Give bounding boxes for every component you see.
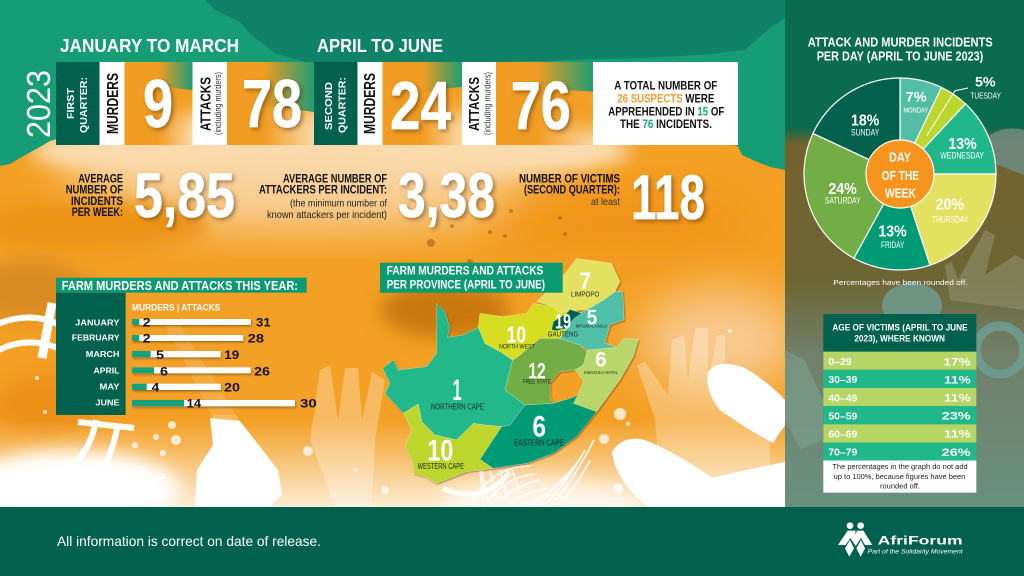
row: February: 2 [143, 332, 151, 346]
row: February: FEBRUARY [72, 333, 120, 343]
second quarter strip: ATTACKS [466, 77, 483, 131]
province: Limpopo: LIMPOPO [571, 292, 600, 299]
pie labels: THURSDAY [932, 214, 968, 224]
row: 70-79: 26% [942, 447, 971, 459]
row: 50-59: 50–59 [828, 411, 858, 422]
pie labels: 5% [975, 74, 996, 90]
second quarter strip: 24 [390, 68, 451, 144]
label: year 2023: 2023 [20, 70, 57, 138]
province: North West: NORTH WEST [499, 343, 535, 350]
logo: AfriForum: AfriForum [878, 533, 963, 547]
province: Limpopo [571, 268, 600, 299]
row: 70-79: 70–79 [828, 448, 858, 459]
row: March [86, 348, 240, 362]
stat: attackers per incident: known attackers per incident) [267, 209, 387, 221]
heading: attack and murder incidents per day: PER DAY (APRIL TO JUNE 2023) [817, 49, 983, 64]
table: age of victims: 2023), WHERE KNOWN [854, 334, 945, 344]
row: 30-39: 30–39 [828, 375, 858, 386]
stat: attackers per incident: ATTACKERS PER INCIDENT: [259, 184, 387, 196]
heading: farm murders per province: FARM MURDERS AND ATTACKS [387, 263, 543, 277]
province: Western Cape: 10 [427, 435, 453, 468]
callout: suspects apprehended: 26 SUSPECTS WERE [617, 93, 715, 105]
row: April: APRIL [94, 365, 120, 375]
centre circle [866, 140, 934, 208]
pie labels: 24% [828, 181, 857, 198]
background: paint splatter [35, 209, 732, 494]
stat: attackers per incident: 3,38 [398, 161, 495, 231]
pie labels: 13% [878, 224, 907, 241]
panel: farm murders and attacks this year [56, 278, 317, 415]
table note: rounded off. [880, 484, 920, 491]
second quarter strip [314, 62, 593, 145]
stat: number of victims: 118 [631, 163, 705, 233]
logo: AfriForum: Part of the Solidarity Movement [868, 549, 963, 556]
row: 0-29 [823, 352, 976, 370]
province: Western Cape [418, 435, 464, 471]
row: 40-49: 11% [944, 393, 971, 405]
stat: number of victims: at least [591, 196, 620, 208]
heading: farm murders per province [380, 263, 563, 293]
stat: incidents per week [66, 161, 235, 231]
province: Gauteng: 19 [555, 310, 571, 334]
background: translucent raised hands [165, 325, 770, 507]
pie labels: 20% [936, 196, 964, 213]
province: Free State: 12 [528, 358, 546, 383]
stat: attackers per incident [259, 161, 495, 231]
row: May [100, 380, 240, 394]
province: Mpumalanga [576, 306, 608, 330]
footer band [0, 507, 1024, 576]
pie labels: TUESDAY [970, 90, 1001, 100]
province: KwaZulu-Natal: 6 [595, 348, 607, 372]
row: February: 28 [248, 332, 264, 346]
province: KwaZulu-Natal [584, 348, 619, 376]
right panel [785, 0, 1024, 507]
pie labels: 13% [948, 136, 977, 153]
second quarter strip: SECOND [323, 82, 335, 130]
row: January: 31 [256, 316, 271, 330]
row: 60-69: 11% [944, 429, 971, 441]
province: Mpumalanga: 5 [587, 306, 597, 330]
row: January: 2 [143, 316, 151, 330]
province: Western Cape: WESTERN CAPE [418, 462, 464, 471]
map shapes [383, 258, 638, 483]
province: Gauteng: GAUTENG [548, 330, 578, 339]
first quarter strip: 78 [242, 66, 302, 142]
tuesday leader line [927, 88, 968, 136]
heading: attack and murder incidents per day [808, 35, 993, 64]
pie labels: WEEK [885, 187, 917, 201]
first quarter strip: ATTACKS [198, 77, 215, 131]
first quarter strip: (including murders) [213, 72, 223, 135]
table: age of victims [823, 314, 976, 493]
province: Northern Cape: NORTHERN CAPE [431, 402, 484, 411]
province: Eastern Cape: EASTERN CAPE [514, 438, 564, 448]
row: 0-29: 17% [943, 356, 971, 368]
province: Eastern Cape [514, 411, 564, 448]
province: Northern Cape [431, 374, 484, 411]
pie labels: SATURDAY [825, 196, 861, 206]
background: darker green paint band [205, 0, 785, 62]
second quarter strip: 76 [511, 68, 571, 144]
pie labels: SUNDAY [851, 128, 879, 138]
panel: farm murders and attacks this year: MURDERS | ATTACKS [132, 302, 220, 312]
stat: incidents per week: 5,85 [134, 161, 235, 231]
row: January: JANUARY [75, 318, 120, 328]
callout: suspects apprehended: APPREHENDED IN 15 OF [608, 106, 724, 118]
callout: suspects apprehended [593, 62, 738, 145]
row: 60-69 [823, 424, 976, 442]
row: March: MARCH [86, 349, 120, 359]
background: fingerprint [443, 440, 594, 507]
pie labels: 7% [906, 89, 927, 105]
pie labels: DAY [889, 151, 911, 165]
callout: suspects apprehended: THE 76 INCIDENTS. [620, 119, 712, 131]
table: age of victims: AGE OF VICTIMS (APRIL TO JUNE [832, 323, 968, 333]
row: June: JUNE [96, 398, 120, 408]
row: May: MAY [100, 381, 120, 391]
map: provinces of South Africa [383, 258, 638, 483]
second quarter strip: QUARTER: [337, 77, 349, 133]
callout: suspects apprehended: A TOTAL NUMBER OF [614, 80, 717, 92]
pie labels: 18% [851, 112, 880, 129]
province: Limpopo: 7 [579, 268, 591, 295]
row: January [75, 316, 271, 330]
province: North West: 10 [507, 321, 526, 347]
row: 30-39 [823, 370, 976, 388]
row: June: 30 [300, 397, 317, 411]
table note: up to 100%, because figures have been [834, 474, 965, 481]
heading: April to June: APRIL TO JUNE [317, 36, 443, 56]
row: 40-49: 40–49 [828, 393, 858, 404]
row: 0-29: 0–29 [828, 357, 852, 368]
row: 50-59 [823, 406, 976, 424]
row: March: 19 [224, 348, 240, 362]
stat: attackers per incident: (the minimum number of [290, 198, 387, 210]
province: Eastern Cape: 6 [532, 411, 546, 444]
province: Gauteng [548, 310, 578, 339]
row: March: 5 [156, 348, 164, 362]
logo: AfriForum [838, 522, 963, 557]
stat: incidents per week: PER WEEK: [72, 207, 123, 219]
note: percentages rounded: Percentages have been rounded off. [833, 278, 968, 287]
stat: number of victims [519, 163, 705, 233]
province: Free State: FREE STATE [523, 378, 551, 385]
row: April: 26 [254, 364, 270, 378]
first quarter strip: QUARTER: [78, 77, 90, 133]
first quarter strip: 9 [143, 66, 173, 142]
first quarter strip: MURDERS [105, 73, 122, 134]
row: May: 4 [152, 380, 160, 394]
row: April: 6 [160, 364, 168, 378]
province: Mpumalanga: MPUMALANGA [576, 324, 608, 329]
pie labels: FRIDAY [881, 240, 904, 250]
row: 40-49 [823, 388, 976, 406]
pie chart: day of the week [804, 74, 1001, 270]
panel: farm murders and attacks this year: FARM MURDERS AND ATTACKS THIS YEAR: [62, 278, 298, 293]
row: April [94, 364, 270, 378]
province: North West [499, 321, 535, 350]
pie labels: OF THE [882, 169, 919, 183]
heading: attack and murder incidents per day: ATTACK AND MURDER INCIDENTS [808, 35, 993, 50]
heading: January to March: JANUARY TO MARCH [60, 36, 239, 56]
second quarter strip: MURDERS [362, 73, 379, 134]
background: white currency-like symbol [0, 303, 134, 500]
pie labels: WEDNESDAY [940, 150, 984, 160]
table note [823, 460, 976, 493]
stat: incidents per week: AVERAGE [78, 174, 123, 186]
row: 30-39: 11% [944, 374, 971, 386]
first quarter strip: FIRST [65, 87, 77, 119]
row: 60-69: 60–69 [828, 429, 858, 440]
row: June [96, 397, 317, 411]
second quarter strip: (including murders) [483, 72, 493, 135]
province: Northern Cape: 1 [453, 374, 462, 407]
pie labels [825, 74, 1001, 250]
pie labels: MONDAY [903, 106, 928, 115]
table note: The percentages in the graph do not add [832, 464, 968, 471]
stat: attackers per incident: AVERAGE NUMBER OF [283, 174, 387, 186]
background: translucent shapes in right panel [785, 128, 1024, 450]
first quarter strip [56, 62, 314, 145]
stat: incidents per week: NUMBER OF [66, 184, 123, 196]
text: release note: All information is correct on date of release. [57, 533, 321, 549]
province: KwaZulu-Natal: KWAZULU-NATAL [584, 370, 619, 376]
row: June: 14 [187, 397, 201, 411]
row: May: 20 [224, 380, 240, 394]
heading: farm murders per province: PER PROVINCE (APRIL TO JUNE) [387, 277, 545, 291]
stat: number of victims: NUMBER OF VICTIMS [519, 174, 620, 186]
background: green paint top edge [0, 0, 785, 170]
background: white hand silhouettes [195, 364, 785, 507]
stat: number of victims: (SECOND QUARTER): [524, 184, 620, 196]
row: 70-79 [823, 442, 976, 460]
stat: incidents per week: INCIDENTS [71, 196, 123, 208]
row: 50-59: 23% [942, 411, 971, 423]
row: February [72, 332, 264, 346]
